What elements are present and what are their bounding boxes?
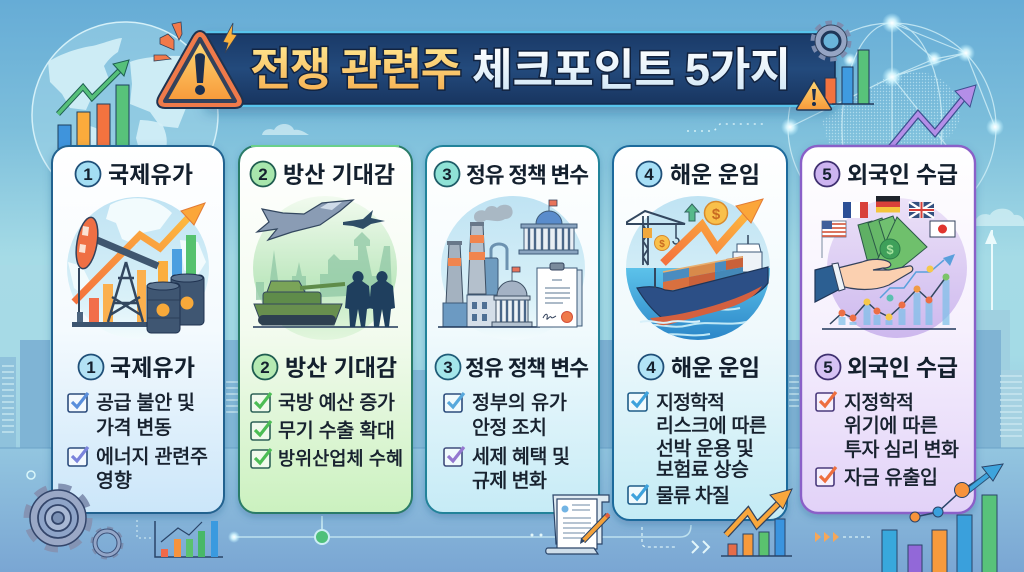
- title text: 체크포인트: [472, 46, 675, 95]
- heading 1: 국제유가: [108, 162, 193, 188]
- heading 4: 4: [644, 165, 654, 184]
- chart top left: [58, 60, 129, 149]
- list 4: 보험료 상승: [656, 459, 749, 481]
- icon: cargo ship, crane and rising arrow: $: [659, 239, 665, 250]
- cloud: [262, 124, 309, 135]
- heading 5: 5: [822, 165, 832, 184]
- heading 3 repeated: 정유 정책 변수: [465, 356, 589, 380]
- decorative arrow dashed: [530, 527, 709, 553]
- heading 2: 2: [258, 165, 268, 184]
- list 2: 무기 수출 확대: [278, 420, 395, 442]
- list 3: 세제 혜택 및: [472, 446, 570, 468]
- chart bottom card 4: [721, 489, 792, 556]
- icon: gears bottom left: [29, 489, 121, 557]
- panel: 5 외국인 수급: [801, 146, 975, 513]
- heading 2 repeated: 2: [260, 358, 270, 377]
- decorative arrows right of card 4: [815, 532, 871, 542]
- list 3: [444, 392, 570, 492]
- list 4: 물류 차질: [656, 485, 730, 507]
- dotted line decoration: [687, 124, 765, 131]
- icon: jets, tank and soldiers: [253, 196, 398, 340]
- icon: cargo ship, crane and rising arrow: [626, 196, 770, 340]
- list 4: 선박 운용 및: [656, 438, 754, 460]
- heading 1 repeated: 1: [86, 358, 96, 377]
- heading 4 repeated: 4: [646, 358, 656, 377]
- heading 1 repeated: 국제유가: [110, 354, 195, 380]
- chart bottom right: [882, 464, 1003, 572]
- list 4: [628, 392, 767, 507]
- list 4: 지정학적: [656, 392, 725, 414]
- background skyline: [0, 209, 1024, 479]
- globe left: [31, 21, 219, 172]
- list 3: 정부의 유가: [472, 392, 567, 414]
- list 3: 규제 변화: [472, 470, 547, 492]
- list 5: 자금 유출입: [844, 467, 938, 489]
- list 3: 안정 조치: [472, 417, 547, 439]
- heading 3: 정유 정책 변수: [466, 164, 589, 188]
- list 5: [816, 392, 959, 489]
- title text: 5가지: [685, 44, 791, 95]
- heading 4: 해운 운임: [670, 162, 760, 188]
- title text: [250, 44, 791, 95]
- small chart bottom left: [137, 520, 223, 557]
- list 2: 국방 예산 증가: [278, 392, 395, 414]
- icon: warning triangle with sparks: [154, 22, 243, 108]
- list 5: 투자 심리 변화: [844, 439, 959, 461]
- heading 5 repeated: 5: [823, 358, 833, 377]
- heading 4 repeated: 해운 운임: [671, 354, 760, 380]
- icon: flags, money in hand and chart: $: [886, 242, 894, 257]
- list 1: 영향: [96, 470, 132, 492]
- title text: 전쟁 관련주: [250, 44, 462, 95]
- list 1: 가격 변동: [96, 417, 172, 439]
- icon: oil pump and barrels: [67, 197, 209, 339]
- list 1: [68, 392, 208, 492]
- list 4: 리스크에 따른: [656, 415, 767, 437]
- panel: 2 방산 기대감: [239, 146, 412, 513]
- icon: document and pen: [546, 495, 609, 554]
- network globe right: [781, 13, 1004, 231]
- icon: flags, money in hand and chart: [815, 196, 967, 338]
- heading 5 repeated: 외국인 수급: [847, 354, 958, 380]
- title banner: [205, 31, 835, 107]
- list 5: 지정학적: [844, 392, 914, 414]
- heading 3: 3: [442, 165, 452, 184]
- panel: 3 정유 정책 변수: [426, 146, 599, 513]
- heading 3 repeated: 3: [443, 358, 453, 377]
- icon: gear and bars right of banner: [797, 24, 874, 110]
- list 1: 공급 불안 및: [96, 392, 195, 414]
- heading 2: 방산 기대감: [283, 162, 395, 188]
- bottom connector line: [228, 516, 691, 544]
- list 2: [251, 392, 403, 469]
- panel: 1 국제유가: [52, 146, 224, 513]
- icon: refinery, government buildings and document: [438, 196, 585, 340]
- icon: cargo ship, crane and rising arrow: $: [712, 206, 721, 223]
- heading 5: 외국인 수급: [847, 162, 958, 188]
- list 1: 에너지 관련주: [96, 446, 208, 468]
- panel: 4 해운 운임: [613, 146, 787, 520]
- heading 2 repeated: 방산 기대감: [285, 354, 397, 380]
- list 5: 위기에 따른: [844, 415, 938, 437]
- list 2: 방위산업체 수혜: [278, 448, 403, 469]
- heading 1: 1: [83, 165, 93, 184]
